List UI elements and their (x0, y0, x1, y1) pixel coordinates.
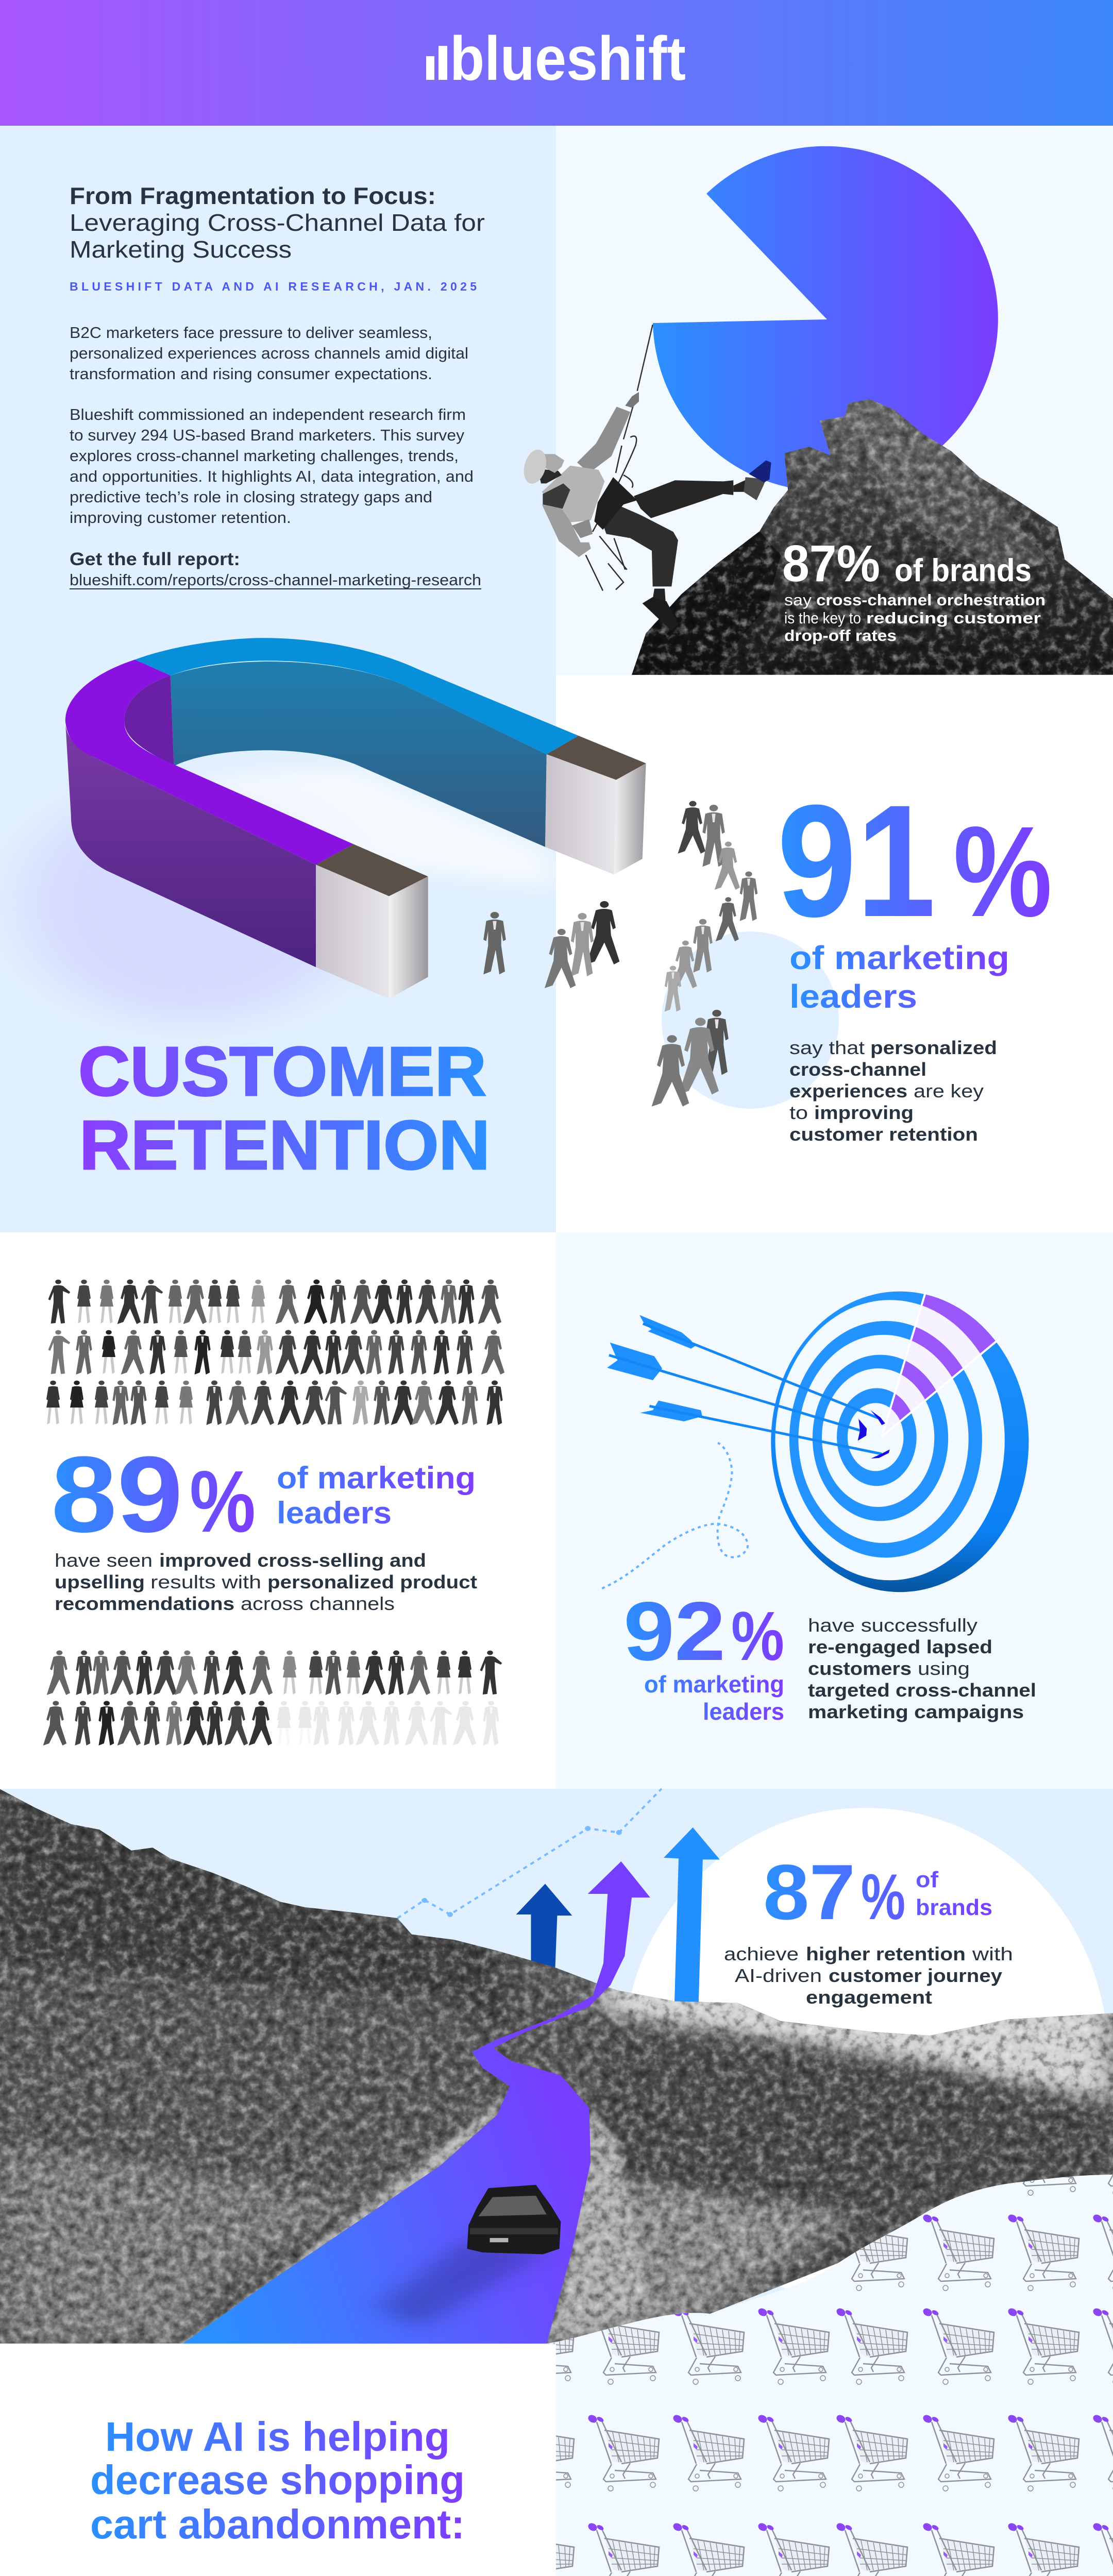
icon: car (467, 2185, 561, 2254)
heading: cart abandonment: (90, 2501, 465, 2547)
heading: customer retention: CUSTOMER (78, 1032, 486, 1110)
stat description: have successfully (808, 1615, 977, 1636)
stat description: higher retention (806, 1943, 966, 1964)
stat description: customers (808, 1658, 912, 1679)
stat description: across channels (241, 1593, 395, 1614)
crowd walking to magnet (483, 801, 757, 1107)
stat: 89%: % (190, 1453, 256, 1551)
stat description: results with (150, 1571, 261, 1592)
hillside photo (0, 1783, 1113, 2346)
white dome (623, 1808, 1108, 2302)
stat: 89% (51, 1434, 476, 1555)
panel: 87% road scene (0, 1783, 1113, 2346)
stat: 92% (623, 1585, 784, 1725)
stat: 91%: leaders (789, 978, 917, 1015)
stat description: customer journey (829, 1965, 1002, 1986)
intro text block: explores cross-channel marketing challenges, trends, (70, 447, 459, 465)
people rows bottom (43, 1650, 502, 1745)
stat description: recommendations (55, 1593, 234, 1614)
stat: 92%: % (731, 1597, 784, 1675)
panel: how AI helps cart abandonment (0, 2344, 556, 2576)
panel: shopping cart pattern and 89% stat (502, 2117, 1113, 2576)
intro text block (70, 324, 474, 527)
stat: 87% of brands: 87 (763, 1849, 855, 1936)
shopping cart grid (502, 2117, 1113, 2576)
stat description (808, 1615, 1036, 1722)
stat description: improved cross-selling and (159, 1550, 426, 1571)
report link: Get the full report: (70, 549, 240, 569)
stat: 87% of brands: say (784, 591, 812, 609)
report link (70, 549, 481, 589)
stat description: improving (814, 1102, 914, 1123)
stat: 87% of brands: 87% (782, 535, 880, 592)
target with arrows (602, 1292, 1028, 1592)
horseshoe magnet (21, 638, 646, 1021)
title (70, 182, 485, 263)
stat: 87% of brands: brands (916, 1895, 992, 1920)
panel: report introduction (0, 126, 556, 1232)
stat description: targeted cross-channel (808, 1680, 1036, 1701)
stat description: are key (914, 1080, 984, 1101)
stat: 87% of brands: of (916, 1867, 938, 1892)
title: From Fragmentation to Focus: (70, 182, 436, 209)
intro text block: predictive tech’s role in closing strategy gaps and (70, 488, 432, 506)
stat: 91%: of marketing (789, 939, 1009, 976)
stat: 87% of brands: drop-off rates (784, 626, 897, 645)
stat description: marketing campaigns (808, 1701, 1024, 1722)
rock mountain (632, 399, 1113, 675)
stat description (789, 1037, 997, 1145)
stat: 92%: leaders (703, 1698, 784, 1725)
stat description: re-engaged lapsed (808, 1636, 992, 1657)
intro text block: to survey 294 US-based Brand marketers. This survey (70, 426, 465, 444)
stat: 92%: 92 (623, 1585, 726, 1678)
panel: 87% orchestration climber (519, 126, 1113, 675)
intro text block: improving customer retention. (70, 509, 291, 527)
people rows top (46, 1279, 504, 1425)
stat description: with (972, 1943, 1013, 1964)
climber (519, 325, 771, 631)
stat: 91% (777, 771, 1052, 1015)
stat description: personalized (870, 1037, 997, 1058)
stat description: have seen (55, 1550, 153, 1571)
stat description: experiences (789, 1080, 907, 1101)
stat: 92%: of marketing (644, 1671, 784, 1698)
title: Marketing Success (70, 236, 292, 263)
dotted curve (602, 1443, 748, 1588)
stat description: using (918, 1658, 970, 1679)
stat description: customer retention (789, 1124, 978, 1145)
stat description (55, 1550, 477, 1614)
intro text block: B2C marketers face pressure to deliver seamless, (70, 324, 432, 342)
stat: 87% of brands (782, 535, 1045, 645)
logo: blueshift: blueshift (450, 23, 686, 93)
report link: blueshift.com/reports/cross-channel-marketing-research (70, 571, 481, 589)
intro text block: and opportunities. It highlights AI, data integration, and (70, 467, 474, 485)
header banner (0, 0, 1113, 126)
stat description: to (789, 1102, 808, 1123)
stat: 87% of brands: % (861, 1861, 905, 1933)
stat description: personalized product (267, 1571, 477, 1592)
stat description: upselling (55, 1571, 145, 1592)
heading (90, 2414, 465, 2547)
stat: 91%: % (953, 800, 1052, 943)
heading: customer retention (78, 1032, 490, 1184)
stat description (724, 1943, 1013, 2008)
stat: 89%: 89 (51, 1434, 183, 1555)
growth arrows and dotted trend line (397, 1789, 720, 2007)
stat: 87% of brands: cross-channel orchestration (816, 591, 1045, 609)
heading: How AI is helping (105, 2414, 450, 2460)
panel: 92% re-engaged (556, 1232, 1113, 1789)
panel: 89% cross-selling (0, 1232, 556, 1789)
stat description: say that (789, 1037, 865, 1058)
stat: 89%: leaders (277, 1496, 392, 1530)
research subtitle: BLUESHIFT DATA AND AI RESEARCH, JAN. 2025 (70, 280, 477, 293)
stat: 87% of brands: of brands (895, 553, 1032, 588)
stat: 89%: of marketing (277, 1461, 476, 1495)
intro text block: transformation and rising consumer expectations. (70, 365, 432, 383)
panel: 91% customer retention (21, 638, 1113, 1232)
pie chart (653, 146, 998, 492)
stat description: AI-driven (735, 1965, 822, 1986)
intro text block: personalized experiences across channels amid digital (70, 344, 468, 362)
heading: decrease shopping (90, 2457, 465, 2503)
background circle (662, 931, 839, 1109)
stat description: engagement (806, 1987, 932, 2008)
heading: customer retention: RETENTION (79, 1106, 490, 1184)
title: Leveraging Cross-Channel Data for (70, 209, 485, 236)
road becoming arrow (183, 1861, 650, 2344)
stat description: achieve (724, 1943, 799, 1964)
stat: 87% of brands (763, 1849, 992, 1936)
stat: 87% of brands: is the key to (784, 609, 861, 627)
stat: 91%: 91 (777, 771, 936, 950)
stat: 87% of brands: reducing customer (866, 609, 1041, 627)
intro text block: Blueshift commissioned an independent research firm (70, 405, 466, 423)
stat description: cross-channel (789, 1059, 926, 1080)
